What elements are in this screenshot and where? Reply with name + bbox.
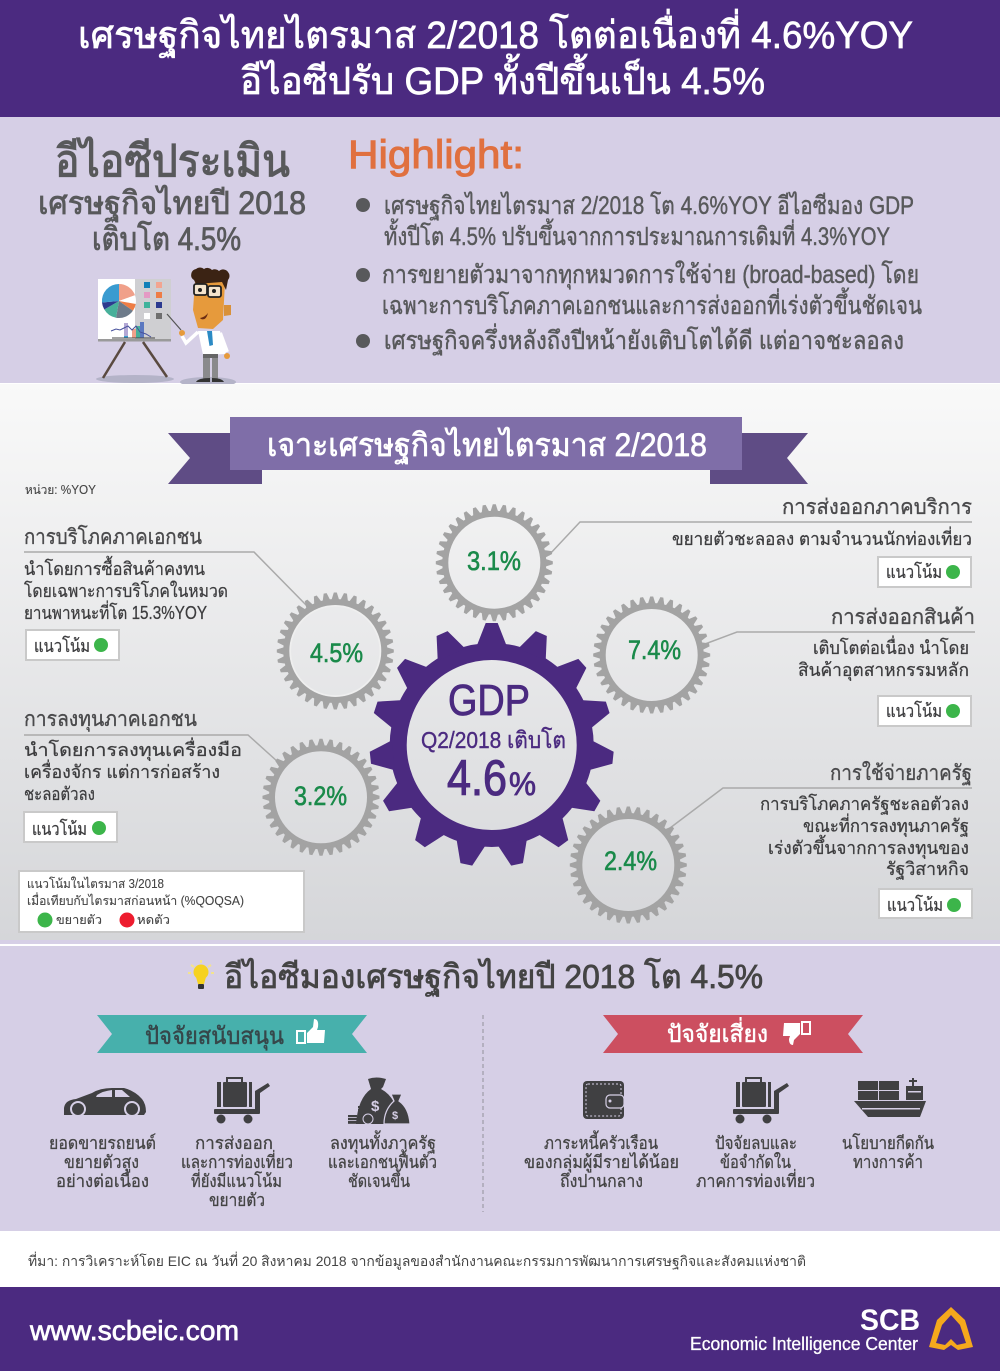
labels: risk factors: ปัจจัยลบและ	[715, 1133, 797, 1153]
gear: GDP 4.6%	[369, 623, 615, 867]
gear: GDP 4.6%: 4.6	[447, 750, 507, 806]
ribbon: supporting factors: ปัจจัยสนับสนุน	[145, 1023, 284, 1051]
gear: GDP 4.6%: Q2/2018 เติบโต	[421, 727, 566, 753]
icon: thumbs down	[783, 1022, 810, 1045]
block: private investment: ชะลอตัวลง	[24, 784, 95, 804]
block: goods exports: การส่งออกสินค้า	[831, 606, 975, 629]
logo: SCB wordmark: Economic Intelligence Center	[690, 1334, 918, 1354]
panel: highlight	[0, 117, 1000, 387]
block: government spending: ขณะที่การลงทุนภาครัฐ	[803, 813, 969, 837]
logo: gold emblem	[929, 1307, 973, 1350]
legend: แนวโน้มในไตรมาส 3/2018	[27, 876, 164, 891]
block: service exports: แนวโน้ม	[886, 561, 942, 582]
icon: luggage cart	[733, 1078, 789, 1124]
block: private consumption: โดยเฉพาะการบริโภคในหมวด	[24, 580, 228, 601]
labels: supporting factors: ขยายตัวสูง	[64, 1152, 139, 1173]
header band	[0, 0, 1000, 117]
labels: supporting factors: ชัดเจนขึ้น	[348, 1168, 410, 1191]
labels: supporting factors: อย่างต่อเนื่อง	[56, 1169, 149, 1191]
gear: GDP 4.6%: %	[509, 766, 536, 802]
block: private consumption: นำโดยการซื้อสินค้าคงทน	[24, 556, 205, 579]
gear: service exports 3.1%: 3.1%	[467, 546, 521, 576]
block: private investment: แนวโน้ม	[32, 818, 87, 839]
icon: car	[64, 1088, 146, 1116]
heading: EIC assessment	[38, 136, 306, 257]
source note	[0, 1231, 1000, 1287]
gear: GDP 4.6%: GDP	[448, 676, 530, 725]
gear: private investment 3.2%	[258, 735, 384, 860]
block: government spending: รัฐวิสาหกิจ	[886, 859, 969, 880]
icon: cargo ship	[854, 1078, 926, 1117]
icon: thumbs up	[297, 1019, 325, 1043]
gear: private investment 3.2%: 3.2%	[294, 781, 347, 811]
logo: SCB wordmark: SCB	[860, 1304, 920, 1337]
block: government spending: แนวโน้ม	[887, 894, 943, 915]
block: private consumption: ยานพาหนะที่โต 15.3%YOY	[24, 600, 207, 623]
labels: supporting factors: การส่งออก	[195, 1133, 273, 1153]
block: private consumption: การบริโภคภาคเอกชน	[24, 525, 202, 549]
gear: government spending 2.4%: 2.4%	[604, 846, 657, 876]
icon: luggage cart	[214, 1078, 270, 1124]
block: private consumption: แนวโน้ม	[34, 635, 90, 656]
icon: light bulb	[188, 960, 214, 989]
block: government spending: เร่งตัวขึ้นจากการลงทุนของ	[768, 835, 969, 859]
panel: outlook	[0, 940, 1000, 1231]
heading: EIC assessment: อีไอซีประเมิน	[55, 136, 290, 186]
legend: หดตัว	[137, 913, 170, 927]
labels: risk factors	[524, 1130, 934, 1191]
block: goods exports: สินค้าอุตสาหกรรมหลัก	[798, 660, 969, 681]
icon: money bags: $	[392, 1110, 398, 1122]
legend: ขยายตัว	[56, 913, 102, 927]
connector lines	[24, 522, 975, 828]
bullet list: ทั้งปีโต 4.5% ปรับขึ้นจากการประมาณการเดิมที่ 4.3%YOY	[384, 218, 890, 251]
bullet list: เศรษฐกิจครึ่งหลังถึงปีหน้ายังเติบโตได้ดี แต่อาจชะลอลง	[384, 323, 904, 355]
block: private investment	[24, 708, 242, 842]
labels: supporting factors: ที่ยังมีแนวโน้ม	[191, 1169, 282, 1191]
ribbon heading	[168, 417, 808, 484]
bullet list: การขยายตัวมาจากทุกหมวดการใช้จ่าย (broad-based) โดย	[382, 260, 919, 290]
heading: Highlight: Highlight:	[348, 133, 524, 177]
title	[78, 9, 913, 103]
bullet list	[356, 191, 922, 355]
heading: EIC assessment: เศรษฐกิจไทยปี 2018	[38, 185, 306, 223]
ribbon: supporting factors	[97, 1015, 367, 1053]
block: service exports: การส่งออกภาคบริการ	[782, 496, 972, 519]
ribbon: risk factors: ปัจจัยเสี่ยง	[667, 1017, 768, 1048]
title: เศรษฐกิจไทยไตรมาส 2/2018 โตต่อเนื่องที่ 4.6%YOY	[78, 9, 913, 58]
labels: supporting factors: และการท่องเที่ยว	[181, 1150, 293, 1172]
unit note: หน่วย: %YOY	[25, 483, 97, 497]
gear: service exports 3.1%	[432, 500, 557, 625]
labels: supporting factors	[49, 1130, 437, 1210]
labels: risk factors: ทางการค้า	[853, 1152, 923, 1172]
labels: risk factors: ของกลุ่มผู้มีรายได้น้อย	[524, 1152, 679, 1173]
panel: GDP breakdown	[0, 384, 1000, 940]
block: government spending: การใช้จ่ายภาครัฐ	[830, 761, 972, 785]
icon: money bags: $	[371, 1098, 380, 1115]
heading: outlook: อีไอซีมองเศรษฐกิจไทยปี 2018 โต 4.5%	[224, 958, 763, 997]
legend	[19, 871, 304, 932]
gear: goods exports 7.4%: 7.4%	[628, 635, 681, 665]
heading: EIC assessment: เติบโต 4.5%	[92, 221, 241, 257]
block: government spending	[760, 761, 972, 918]
logo: SCB wordmark	[690, 1304, 920, 1354]
labels: supporting factors: ยอดขายรถยนต์	[49, 1133, 156, 1153]
footer	[0, 1287, 1000, 1371]
labels: supporting factors: ลงทุนทั้งภาครัฐ	[330, 1130, 436, 1154]
labels: supporting factors: ขยายตัว	[209, 1190, 265, 1210]
labels: risk factors: ข้อจำกัดใน	[720, 1152, 791, 1172]
block: government spending: การบริโภคภาครัฐชะลอตัวลง	[760, 793, 969, 815]
labels: risk factors: ภาระหนี้ครัวเรือน	[544, 1130, 658, 1153]
block: private investment: เครื่องจักร แต่การก่อสร้าง	[24, 759, 220, 782]
gear: private consumption 4.5%	[273, 588, 398, 714]
website: www.scbeic.com	[29, 1315, 239, 1346]
icon: presenter with chart easel	[96, 267, 236, 387]
labels: supporting factors: และเอกชนฟื้นตัว	[328, 1149, 437, 1172]
block: goods exports: แนวโน้ม	[886, 700, 942, 721]
title: อีไอซีปรับ GDP ทั้งปีขึ้นเป็น 4.5%	[240, 53, 765, 103]
block: goods exports	[798, 606, 975, 726]
labels: risk factors: ถึงปานกลาง	[560, 1171, 643, 1191]
ribbon: risk factors	[603, 1015, 863, 1053]
block: private investment: นำโดยการลงทุนเครื่องมือ	[24, 737, 242, 761]
labels: risk factors: นโยบายกีดกัน	[842, 1133, 934, 1153]
gear: goods exports 7.4%	[589, 592, 714, 718]
ribbon heading: เจาะเศรษฐกิจไทยไตรมาส 2/2018	[267, 427, 707, 465]
gear: government spending 2.4%	[566, 802, 691, 928]
gear: private consumption 4.5%: 4.5%	[310, 638, 363, 668]
icon: money bags	[348, 1078, 410, 1124]
legend: เมื่อเทียบกับไตรมาสก่อนหน้า (%QOQSA)	[27, 892, 244, 908]
icon: wallet	[583, 1081, 624, 1119]
block: private consumption	[24, 525, 228, 660]
labels: risk factors: ภาคการท่องเที่ยว	[696, 1169, 815, 1191]
block: service exports: ขยายตัวชะลอลง ตามจำนวนนักท่องเที่ยว	[672, 526, 972, 549]
source note: ที่มา: การวิเคราะห์โดย EIC ณ วันที่ 20 สิงหาคม 2018 จากข้อมูลของสำนักงานคณะกรรมการพัฒนาการเศรษฐกิจและสังคมแห่งชาติ	[28, 1252, 806, 1270]
block: private investment: การลงทุนภาคเอกชน	[24, 708, 197, 732]
block: service exports	[672, 496, 972, 587]
block: goods exports: เติบโตต่อเนื่อง นำโดย	[813, 635, 969, 658]
